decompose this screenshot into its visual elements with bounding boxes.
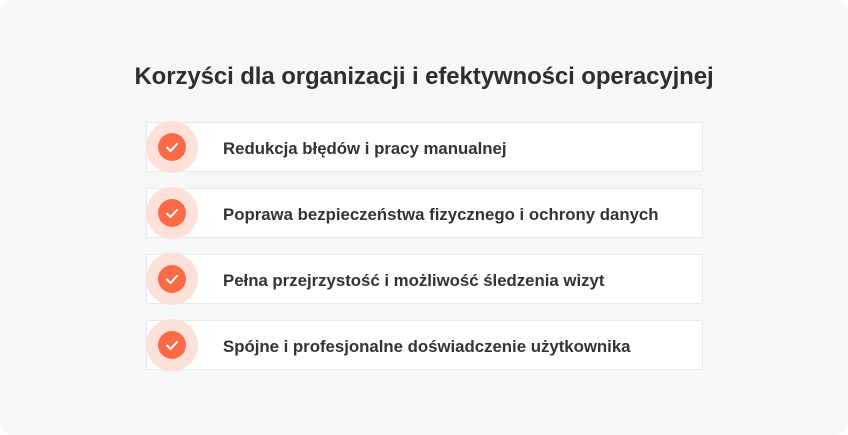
icon: check xyxy=(146,121,198,173)
card: item 3 xyxy=(146,254,703,304)
icon: check xyxy=(146,187,198,239)
text: Pełna przejrzystość i możliwość śledzenia wizyt xyxy=(223,271,604,290)
text: Redukcja błędów i pracy manualnej xyxy=(223,139,507,158)
text: Poprawa bezpieczeństwa fizycznego i ochrony danych xyxy=(223,205,658,224)
card: item 2 xyxy=(146,188,703,238)
card: item 4 xyxy=(146,320,703,370)
text: Spójne i profesjonalne doświadczenie użytkownika xyxy=(223,337,630,356)
title: Korzyści dla organizacji i efektywności operacyjnej xyxy=(134,63,714,90)
icon: check xyxy=(146,253,198,305)
icon: check xyxy=(146,319,198,371)
card: item 1 xyxy=(146,122,703,172)
